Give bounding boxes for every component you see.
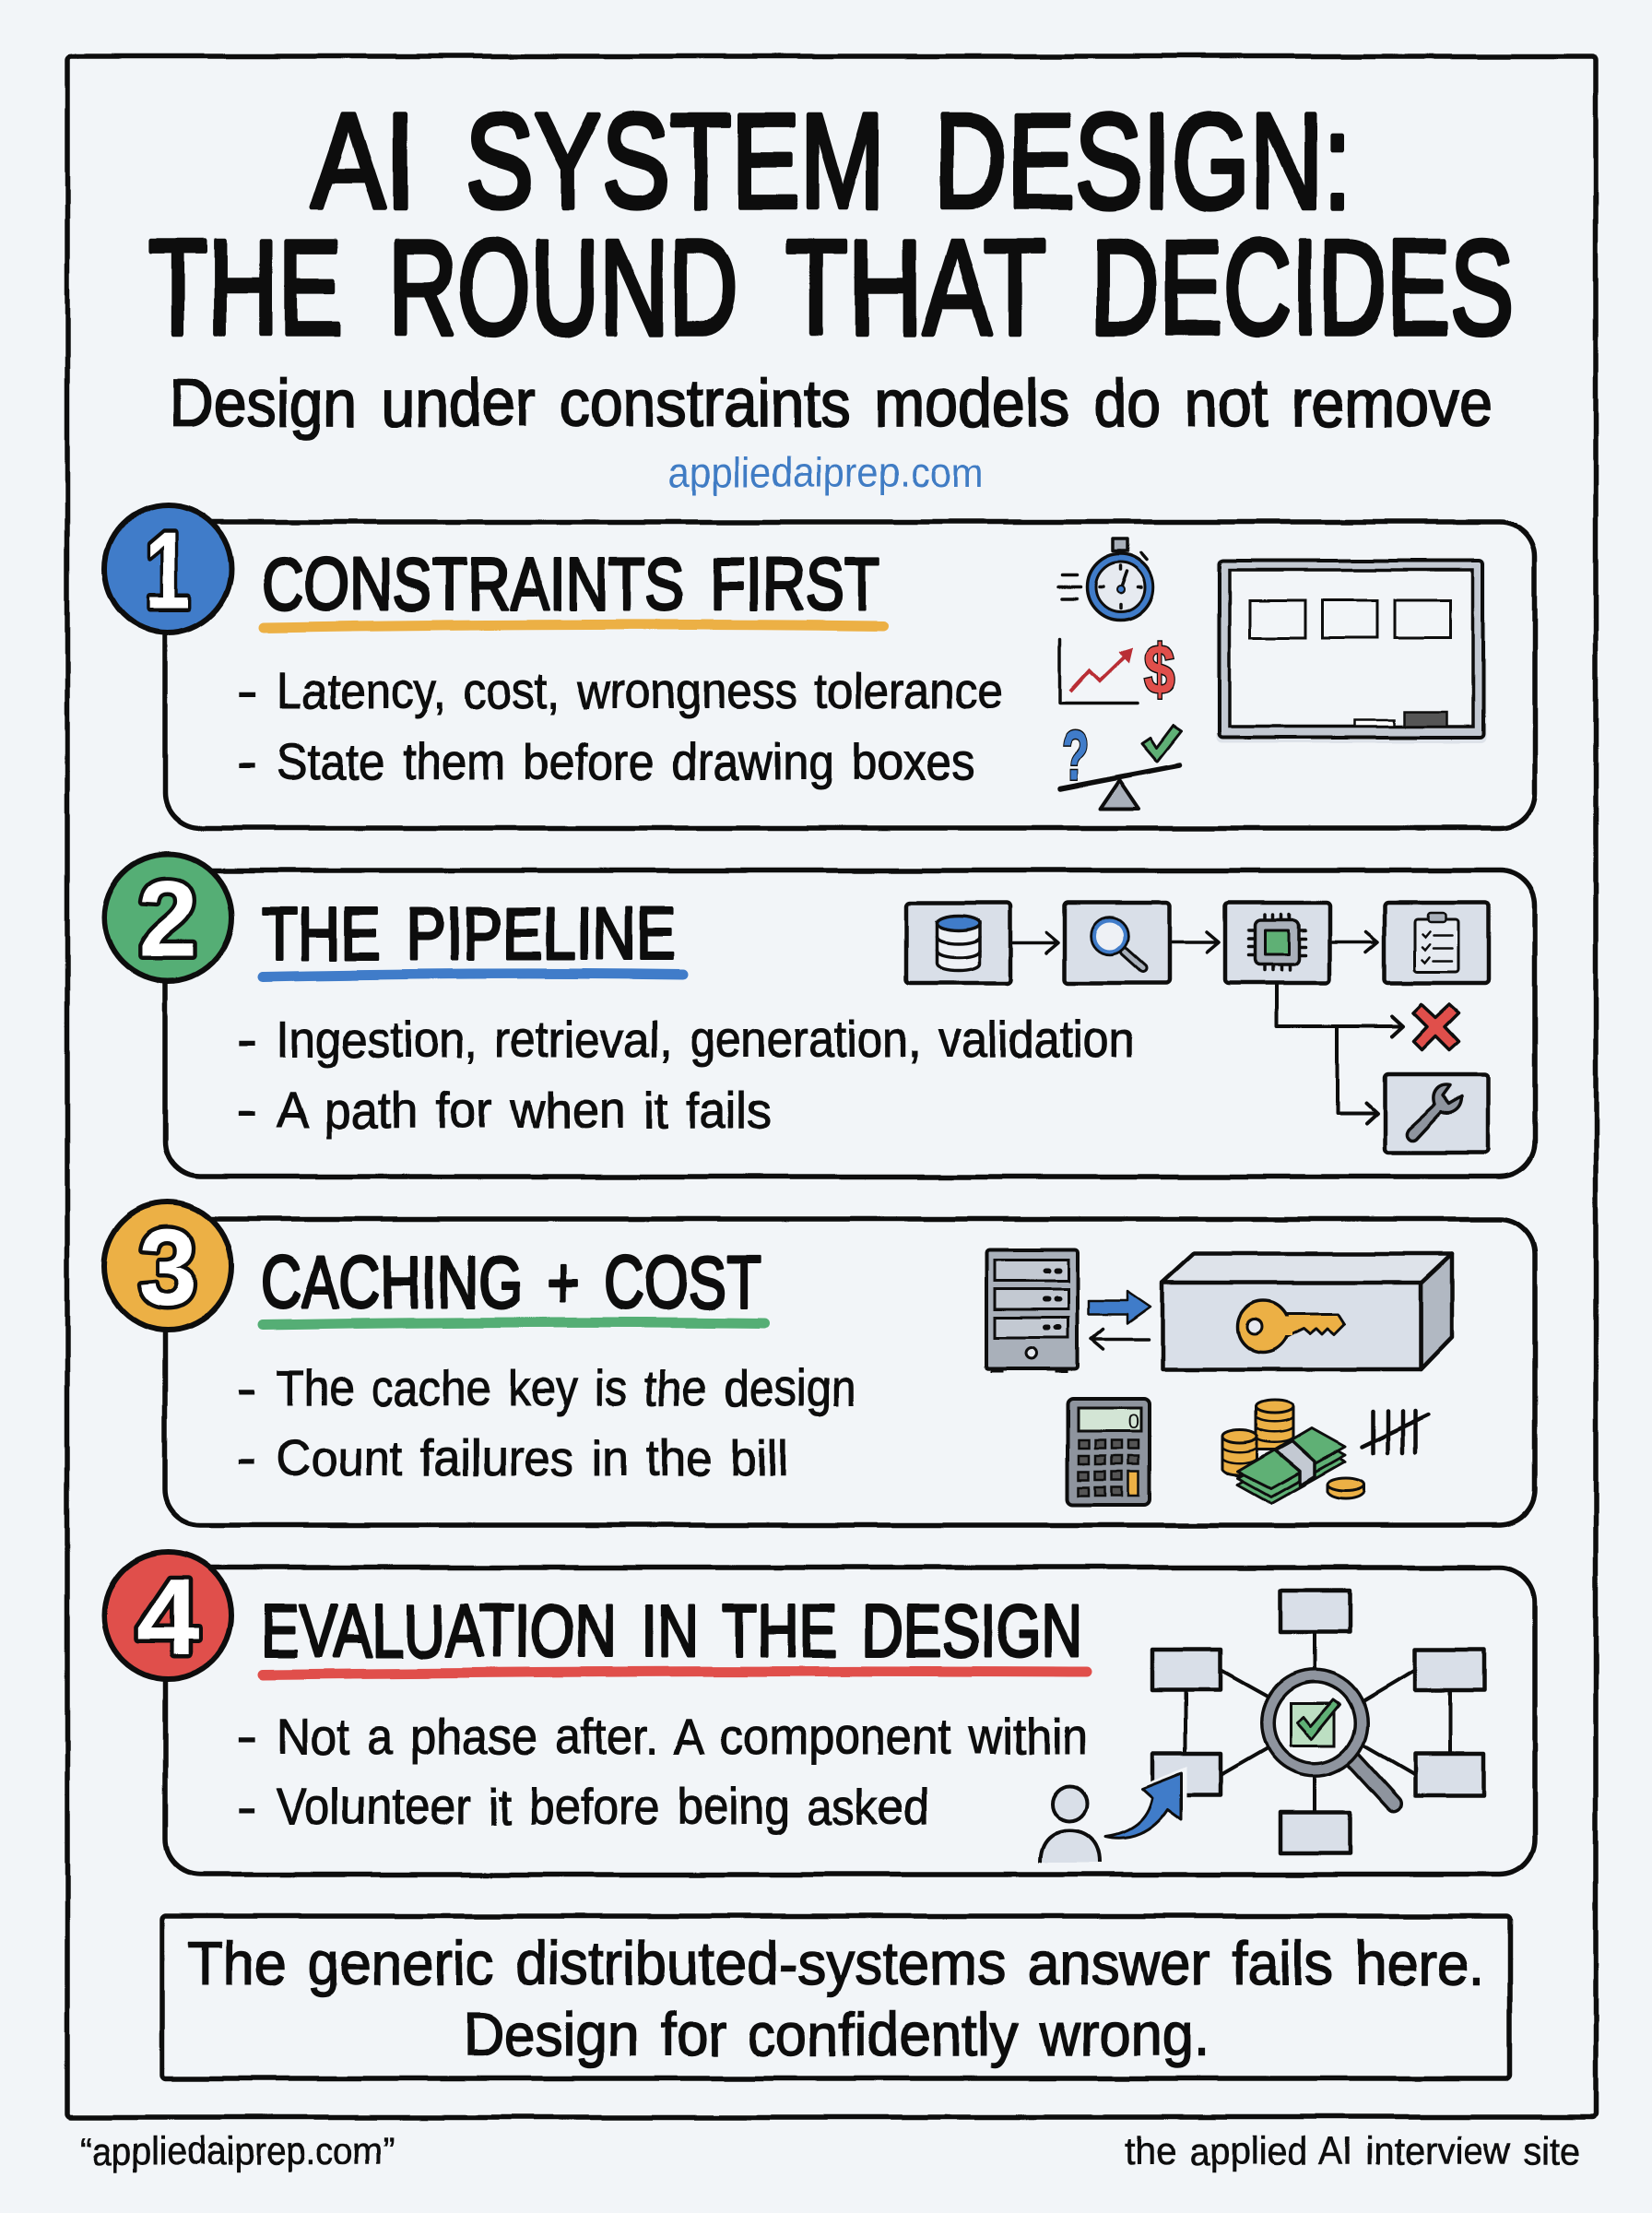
icon: rising cost chart — [1060, 631, 1175, 709]
callout: The generic distributed-systems answer fails here. — [188, 1929, 1484, 1997]
title: DESIGN: — [934, 86, 1351, 236]
title: AI — [311, 86, 416, 236]
icon: magnifier with check — [1268, 1675, 1394, 1804]
number badge 3 — [104, 1202, 231, 1330]
bullets: - — [237, 1359, 257, 1416]
icon: balance scale — [1060, 717, 1181, 809]
panel: constraints first — [104, 505, 1535, 828]
icon: database box — [906, 903, 1010, 983]
bullets: Volunteer it before being asked — [277, 1778, 929, 1835]
number badge 3: 3 — [138, 1207, 197, 1329]
title: THE — [148, 212, 343, 362]
bullets: Not a phase after. A component within — [277, 1708, 1088, 1765]
heading: CONSTRAINTS FIRST — [261, 543, 880, 625]
icon: search box — [1065, 903, 1170, 983]
bullets: - — [237, 1011, 257, 1068]
heading underline — [263, 1671, 1087, 1675]
bullets: Latency, cost, wrongness tolerance — [277, 662, 1003, 719]
icon: server — [986, 1249, 1078, 1371]
icon: coins and cash — [1222, 1401, 1364, 1503]
icon: whiteboard — [1217, 559, 1486, 743]
title: THAT — [785, 212, 1046, 362]
bullets: Count failures in the bill — [277, 1429, 788, 1486]
arrow: volunteer evaluation — [1105, 1767, 1187, 1839]
heading underline — [263, 974, 683, 976]
icon: tally marks — [1362, 1411, 1428, 1453]
bullets: State them before drawing boxes — [277, 733, 975, 790]
arrow: request to cache — [1089, 1291, 1150, 1323]
bullets — [237, 662, 1003, 790]
pipeline diagram — [906, 903, 1489, 1153]
heading underline — [263, 1322, 764, 1325]
heading underline — [263, 624, 884, 628]
panel: the pipeline — [104, 854, 1535, 1177]
bullets: - — [237, 1429, 257, 1486]
site link: appliedaiprep.com — [668, 449, 984, 496]
callout: Design for confidently wrong. — [463, 2000, 1210, 2068]
heading: THE PIPELINE — [261, 893, 676, 975]
icon: person — [1040, 1786, 1100, 1863]
node boxes — [1152, 1591, 1484, 1853]
title: SYSTEM — [466, 86, 885, 236]
callout — [162, 1916, 1510, 2078]
panel: evaluation in the design — [104, 1552, 1535, 1875]
footer: site name: “appliedaiprep.com” — [80, 2129, 395, 2172]
arrow — [1013, 932, 1058, 953]
heading: CACHING + COST — [261, 1241, 761, 1323]
subtitle: Design under constraints models do not remove — [170, 367, 1493, 441]
icon: calculator — [1068, 1399, 1150, 1505]
bullets: - — [237, 1708, 257, 1765]
panel: caching and cost — [104, 1202, 1535, 1525]
bullets: Ingestion, retrieval, generation, validation — [277, 1011, 1134, 1068]
number badge 4: 4 — [136, 1556, 199, 1678]
bullets — [237, 1708, 1088, 1835]
number badge 1 — [104, 505, 231, 633]
heading: EVALUATION IN THE DESIGN — [261, 1590, 1082, 1672]
arrow — [1173, 932, 1219, 953]
icon: chip box — [1225, 903, 1329, 983]
arrow — [1332, 932, 1378, 953]
arrow: response from cache — [1092, 1329, 1149, 1349]
icon: cache block with key — [1162, 1254, 1452, 1369]
number badge 2 — [104, 854, 231, 981]
title: ROUND — [388, 212, 738, 362]
bullets: - — [237, 1778, 257, 1835]
icon: calculator: 0 — [1128, 1410, 1139, 1433]
failure branch arrows — [1277, 983, 1403, 1123]
footer: tagline: the applied AI interview site — [1126, 2129, 1580, 2172]
icon: key — [1237, 1301, 1345, 1353]
number badge 1: 1 — [145, 510, 191, 632]
bullets: - — [237, 1082, 257, 1139]
title — [148, 86, 1514, 362]
icon: clipboard box — [1385, 903, 1489, 983]
icon: stopwatch — [1058, 539, 1153, 621]
bullets — [237, 1011, 1134, 1139]
icon: rising cost chart: $ — [1144, 631, 1175, 709]
icon: balance scale: ? — [1061, 717, 1089, 794]
bullets: - — [237, 733, 257, 790]
number badge 2: 2 — [138, 858, 197, 980]
icon: wrench box — [1385, 1074, 1489, 1153]
evaluation diagram — [1040, 1591, 1484, 1863]
number badge 4 — [104, 1552, 231, 1679]
bullets — [237, 1359, 856, 1486]
bullets: A path for when it fails — [277, 1082, 772, 1139]
bullets: The cache key is the design — [277, 1359, 856, 1416]
bullets: - — [237, 662, 257, 719]
icon: red cross — [1413, 1004, 1458, 1049]
